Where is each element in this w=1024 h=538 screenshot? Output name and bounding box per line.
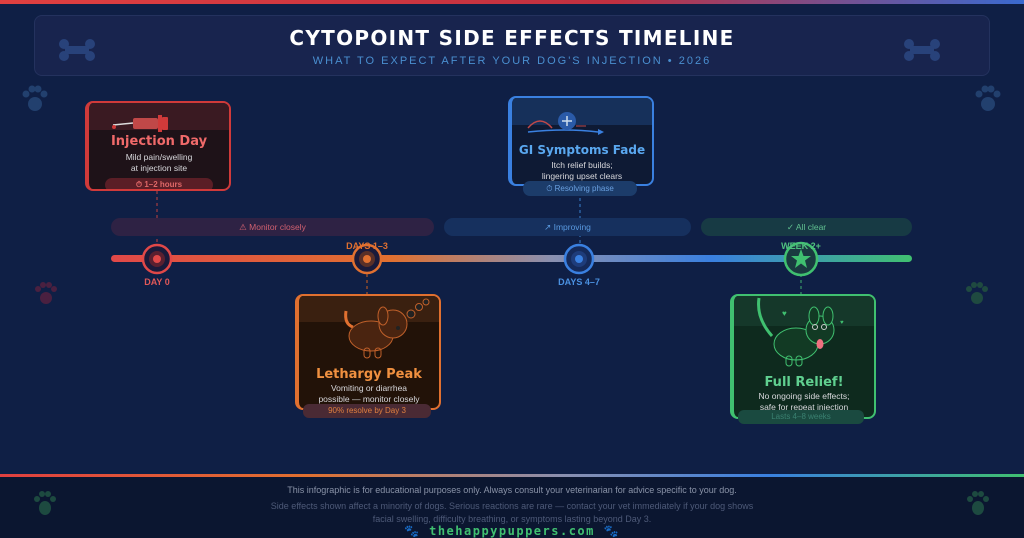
footer paws	[34, 491, 989, 515]
description: Vomiting or diarrhea	[331, 383, 407, 393]
label day 0: DAY 0	[144, 277, 170, 287]
description: Itch relief builds;	[551, 160, 613, 170]
badge: resolving phase	[523, 181, 637, 196]
node days 4-7	[565, 245, 593, 273]
header panel	[34, 15, 990, 76]
description: at injection site	[131, 163, 187, 173]
dashed connectors	[157, 186, 801, 294]
description: lingering upset clears	[542, 171, 622, 181]
subtitle: WHAT TO EXPECT AFTER YOUR DOG'S INJECTION • 2026	[313, 55, 711, 67]
node week 2+	[785, 243, 817, 275]
description	[318, 383, 420, 404]
website: 🐾 thehappypuppers.com 🐾	[404, 524, 620, 538]
badge	[105, 178, 213, 192]
icon: happy dog: ♥	[782, 309, 787, 318]
card: injection day	[85, 101, 231, 191]
heading: Lethargy Peak	[316, 367, 422, 382]
card: GI symptoms fade	[508, 96, 654, 186]
description: possible — monitor closely	[318, 394, 420, 404]
icon: happy dog	[757, 298, 844, 366]
label week 2+: WEEK 2+	[781, 241, 821, 251]
card: lethargy peak	[295, 294, 441, 410]
description: No ongoing side effects;	[758, 391, 850, 401]
icon: sleeping dog	[344, 298, 430, 358]
label days 4-7: DAYS 4–7	[558, 277, 600, 287]
disclaimer text: This infographic is for educational purposes only. Always consult your veterinarian for advice specific to your dog.	[287, 485, 737, 495]
heading: Full Relief!	[764, 375, 844, 390]
warning text: Side effects shown affect a minority of dogs. Serious reactions are rare — contact your vet immediately if your dog shows	[271, 501, 753, 511]
heading: GI Symptoms Fade	[519, 143, 645, 157]
timeline	[111, 242, 912, 276]
footer gradient line	[0, 474, 1024, 477]
badge: 90% resolve	[303, 404, 431, 418]
description	[758, 391, 850, 412]
icon: syringe	[112, 115, 168, 132]
timeline bar	[111, 255, 912, 262]
phase pill: improving	[444, 218, 691, 236]
description: safe for repeat injection	[760, 402, 848, 412]
label days 1-3: DAYS 1–3	[346, 241, 388, 251]
title: CYTOPOINT SIDE EFFECTS TIMELINE	[289, 26, 735, 50]
top gradient bar	[0, 0, 1024, 4]
node days 1-3	[353, 245, 381, 273]
warning text: facial swelling, difficulty breathing, or symptoms lasting beyond Day 3.	[373, 514, 651, 524]
phase pill: all clear: ✓ All clear	[787, 222, 826, 232]
node day 0	[143, 245, 171, 273]
badge: lasts 4-8 weeks: Lasts 4–8 weeks	[771, 412, 831, 421]
heading: Injection Day	[111, 134, 207, 149]
badge: 90% resolve: 90% resolve by Day 3	[328, 406, 406, 415]
warning text	[271, 501, 753, 524]
footer background	[0, 476, 1024, 538]
phase pill: monitor	[111, 218, 434, 236]
description	[126, 152, 192, 173]
badge: resolving phase: ⏱ Resolving phase	[546, 184, 614, 193]
card: full relief	[730, 294, 876, 419]
phase pill: monitor: ⚠ Monitor closely	[239, 222, 306, 232]
phase pill: all clear	[701, 218, 912, 236]
badge: ⏱ 1–2 hours	[136, 180, 182, 189]
icon: happy dog: ♥	[840, 320, 844, 326]
description: Mild pain/swelling	[126, 152, 192, 162]
icon: stomach wave	[528, 112, 604, 135]
phase pill: improving: ↗ Improving	[544, 222, 591, 232]
badge: lasts 4-8 weeks	[738, 410, 864, 424]
description	[542, 160, 622, 181]
